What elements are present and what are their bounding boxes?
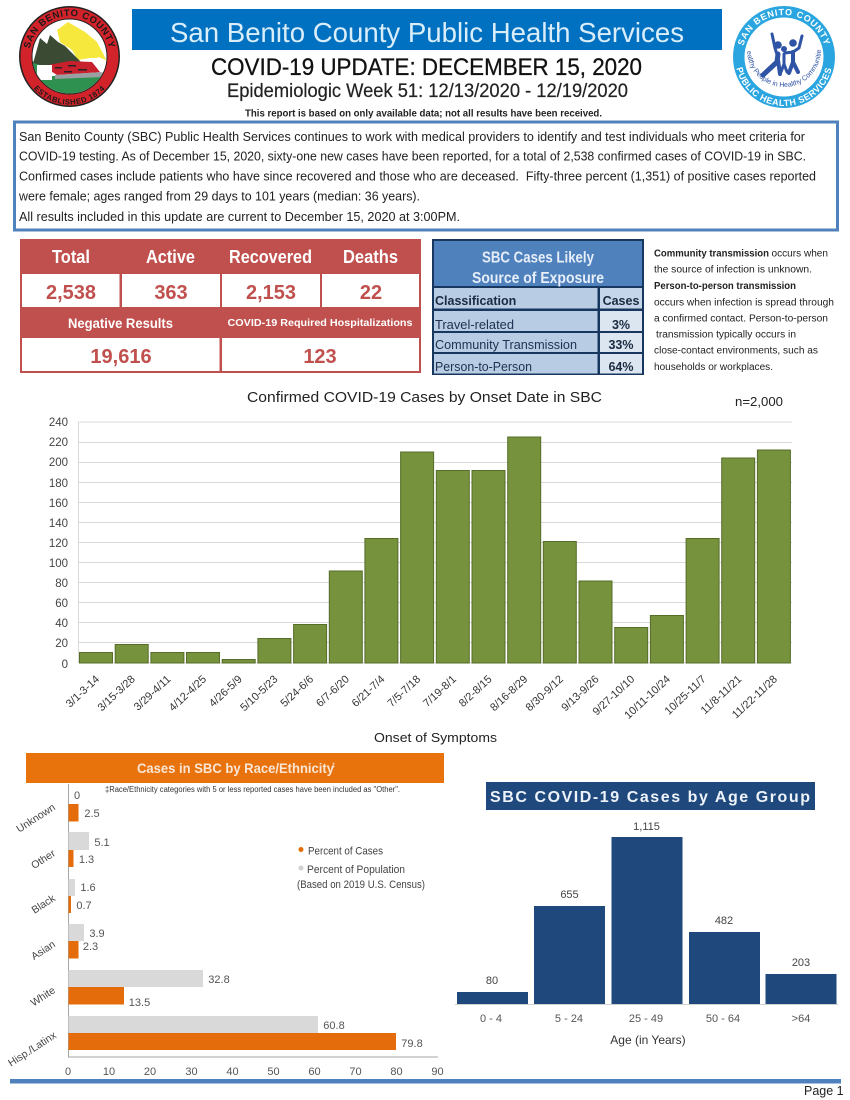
- y-axis labels: 60: [55, 598, 68, 610]
- legend: Percent of Cases: [308, 846, 383, 858]
- text block: transmission definitions: households or workplaces.: [654, 362, 773, 373]
- x-axis labels: 3/1-3-14: [64, 673, 102, 710]
- x-axis labels: 4/26-5/9: [207, 673, 245, 710]
- text block: transmission definitions: Community transmission: [654, 248, 769, 260]
- title banner: [132, 9, 722, 50]
- panel: summary text: All results included in this update are current to December 15, 2020 at 3:00PM.: [19, 210, 460, 224]
- x-axis labels: 6/21-7/4: [350, 673, 387, 710]
- axis labels: [65, 1066, 444, 1078]
- panel: likely source of exposure table: Travel-related: [435, 318, 514, 332]
- value labels: 0.7: [76, 900, 92, 912]
- x-axis labels: 5/10-5/23: [238, 673, 280, 714]
- heading: age group banner: [486, 782, 815, 810]
- heading: age group banner: SBC COVID-19 Cases by Age Group: [490, 789, 810, 806]
- x-axis labels: 8/30-9/12: [524, 673, 566, 714]
- y-axis labels: 40: [55, 618, 68, 630]
- footnote: race categories: ‡Race/Ethnicity categories with 5 or less reported cases have been included as "Other".: [105, 785, 400, 794]
- axis title: onset of symptoms: Onset of Symptoms: [374, 730, 498, 745]
- value labels: 2.5: [84, 808, 100, 820]
- value labels: [486, 821, 810, 987]
- age labels: [480, 1013, 810, 1025]
- y-axis labels: 20: [55, 638, 68, 650]
- legend: [297, 846, 425, 891]
- logo: San Benito County seal: [19, 6, 120, 107]
- axis labels: 0: [65, 1066, 71, 1078]
- x-axis labels: 10/25-11/7: [663, 673, 709, 718]
- panel: likely source of exposure table: 33%: [608, 338, 634, 352]
- axis labels: 10: [103, 1066, 115, 1078]
- panel: case totals table: 22: [360, 282, 382, 304]
- legend: Percent of Population: [307, 864, 405, 876]
- axis labels: 20: [144, 1066, 156, 1078]
- text block: transmission definitions: [654, 248, 834, 373]
- heading: epidemiologic week: Epidemiologic Week 51: 12/13/2020 - 12/19/2020: [227, 81, 628, 102]
- bar chart: cases by onset date: [49, 417, 792, 722]
- panel: case totals table: [20, 239, 421, 373]
- label: sample size: n=2,000: [735, 395, 783, 409]
- x-axis labels: 3/29-4/11: [132, 673, 173, 713]
- panel: case totals table: 2,153: [246, 282, 296, 304]
- axis labels: 80: [390, 1066, 403, 1078]
- x-axis labels: 10/11-10/24: [622, 673, 673, 722]
- x-axis labels: 9/27-10/10: [591, 673, 637, 718]
- x-axis labels: 11/22-11/28: [730, 673, 780, 721]
- panel: summary text: were female; ages ranged from 29 days to 101 years (median: 36 years).: [18, 190, 420, 204]
- axis labels: 70: [349, 1066, 362, 1078]
- value labels: 1,115: [633, 821, 660, 833]
- heading: race and ethnicity banner: ‡: [332, 763, 335, 769]
- panel: case totals table: COVID-19 Required Hospitalizations: [228, 317, 413, 329]
- panel: case totals table: Total: [52, 247, 90, 267]
- title banner: San Benito County Public Health Services: [170, 17, 684, 48]
- page number: Page 1: [804, 1084, 844, 1098]
- text block: transmission definitions: the source of infection is unknown.: [654, 264, 812, 276]
- x-axis labels: 8/2-8/15: [457, 673, 495, 710]
- panel: case totals table: 2,538: [46, 282, 96, 304]
- bars: [80, 437, 790, 663]
- age labels: 0 - 4: [480, 1013, 502, 1025]
- category labels: Hisp./Latinx: [6, 1029, 59, 1069]
- category labels: Unknown: [14, 801, 58, 835]
- text block: transmission definitions: transmission typically occurs in: [656, 330, 796, 340]
- value labels: 13.5: [129, 997, 150, 1009]
- x-axis labels: 8/16-8/29: [488, 673, 530, 714]
- bar chart: cases by age group: [455, 821, 838, 1047]
- y-axis labels: 160: [49, 498, 68, 510]
- value labels: 0: [74, 790, 80, 802]
- value labels: 5.1: [94, 837, 110, 849]
- x-axis labels: 4/12-4/25: [167, 673, 209, 714]
- panel: case totals table: 19,616: [90, 346, 152, 368]
- axis labels: 30: [185, 1066, 198, 1078]
- heading: race and ethnicity banner: [26, 753, 444, 783]
- value labels: 60.8: [323, 1020, 345, 1032]
- category labels: White: [29, 984, 58, 1009]
- panel: likely source of exposure table: [432, 239, 644, 375]
- category labels: Black: [30, 892, 58, 917]
- logo: public health services: PUBLIC HEALTH SERVICES: [736, 67, 832, 106]
- text block: transmission definitions: a confirmed contact. Person-to-person: [654, 314, 828, 324]
- panel: likely source of exposure table: Classification: [435, 294, 516, 308]
- panel: likely source of exposure table: SBC Cases Likely: [482, 250, 594, 266]
- footer rule: [10, 1079, 841, 1084]
- logo: San Benito County seal: ESTABLISHED 1874: [34, 85, 104, 105]
- x-axis labels: 5/24-6/6: [278, 673, 316, 710]
- legend: (Based on 2019 U.S. Census): [297, 879, 425, 891]
- bars: [457, 837, 836, 1004]
- category labels: [6, 801, 59, 1069]
- x-axis labels: 6/7-6/20: [314, 673, 352, 710]
- x-axis labels: 7/19-8/1: [421, 673, 459, 710]
- x-axis labels: 3/15-3/28: [96, 673, 138, 714]
- heading: race and ethnicity banner: Cases in SBC by Race/Ethnicity: [137, 760, 334, 776]
- logo: public health services: [733, 6, 835, 108]
- panel: summary text: COVID-19 testing. As of December 15, 2020, sixty-one new cases have been reported, for a total of 2,538 confirmed cases of COVID-19 in SBC.: [19, 150, 806, 164]
- case bars: [68, 804, 396, 1050]
- panel: likely source of exposure table: Cases: [603, 294, 639, 308]
- axis labels: 90: [431, 1066, 444, 1078]
- panel: summary text: Confirmed cases include patients who have since recovered and those who are deceased. Fifty-three percent (1,351) of positive cases reported: [19, 170, 816, 184]
- value labels: 3.9: [89, 928, 105, 940]
- x-axis labels: 7/5-7/18: [385, 673, 423, 710]
- axis labels: 50: [267, 1066, 280, 1078]
- y-axis labels: 240: [49, 417, 68, 429]
- y-axis labels: [49, 417, 68, 671]
- panel: likely source of exposure table: Community Transmission: [435, 338, 577, 352]
- x-axis labels: [64, 673, 780, 722]
- panel: likely source of exposure table: 64%: [608, 360, 634, 374]
- y-axis labels: 100: [49, 558, 68, 570]
- value labels: 79.8: [401, 1038, 423, 1050]
- panel: case totals table: Deaths: [343, 247, 398, 267]
- heading: onset date chart title: Confirmed COVID-19 Cases by Onset Date in SBC: [247, 389, 602, 406]
- y-axis labels: 200: [49, 457, 68, 469]
- heading: COVID-19 update date: COVID-19 UPDATE: DECEMBER 15, 2020: [211, 54, 642, 81]
- y-axis labels: 220: [49, 437, 68, 449]
- y-axis labels: 140: [49, 518, 68, 530]
- category labels: Other: [29, 847, 58, 872]
- panel: likely source of exposure table: 3%: [612, 318, 630, 332]
- panel: likely source of exposure table: Person-to-Person: [435, 360, 532, 374]
- y-axis labels: 0: [62, 659, 68, 671]
- value labels: 1.6: [80, 882, 96, 894]
- age labels: >64: [792, 1013, 810, 1025]
- axis title: Age (in Years): [610, 1033, 686, 1047]
- category labels: Asian: [29, 938, 58, 963]
- logo: San Benito County seal: SAN BENITO COUNTY: [24, 9, 116, 48]
- age labels: 5 - 24: [555, 1013, 583, 1025]
- x-axis labels: 9/13-9/26: [559, 673, 602, 714]
- panel: case totals table: 123: [303, 346, 337, 368]
- value labels: 655: [560, 889, 579, 901]
- panel: summary text: [14, 122, 838, 230]
- value labels: 1.3: [79, 854, 94, 866]
- panel: case totals table: Recovered: [229, 247, 312, 267]
- age labels: 25 - 49: [629, 1013, 663, 1025]
- value labels: [74, 790, 423, 1050]
- value labels: 2.3: [83, 941, 98, 953]
- population bars: [68, 832, 318, 1033]
- axis labels: 40: [226, 1066, 239, 1078]
- logo: public health services: SAN BENITO COUNTY: [738, 8, 830, 46]
- bar chart: cases by race and ethnicity: [6, 784, 444, 1078]
- axis labels: 60: [308, 1066, 321, 1078]
- value labels: 32.8: [208, 974, 230, 986]
- panel: case totals table: 363: [154, 282, 188, 304]
- x-axis labels: 11/8-11/21: [699, 673, 744, 717]
- value labels: 80: [486, 975, 498, 987]
- panel: likely source of exposure table: Source of Exposure: [472, 270, 604, 287]
- value labels: 203: [792, 957, 810, 969]
- note: data availability: This report is based on only available data; not all results have been received.: [245, 108, 602, 120]
- text block: transmission definitions: Person-to-person transmission: [654, 281, 796, 292]
- text block: transmission definitions: occurs when infection is spread through: [654, 298, 834, 308]
- panel: case totals table: Active: [146, 247, 195, 267]
- value labels: 482: [715, 915, 733, 927]
- panel: summary text: San Benito County (SBC) Public Health Services continues to work with medical providers to identify and test individuals who meet criteria for: [19, 130, 805, 144]
- y-axis labels: 120: [49, 538, 68, 550]
- y-axis labels: 80: [55, 578, 68, 590]
- panel: case totals table: Negative Results: [68, 316, 173, 331]
- y-axis labels: 180: [49, 478, 68, 490]
- text block: transmission definitions: occurs when: [772, 248, 828, 260]
- text block: transmission definitions: close-contact environments, such as: [654, 346, 818, 356]
- age labels: 50 - 64: [706, 1013, 740, 1025]
